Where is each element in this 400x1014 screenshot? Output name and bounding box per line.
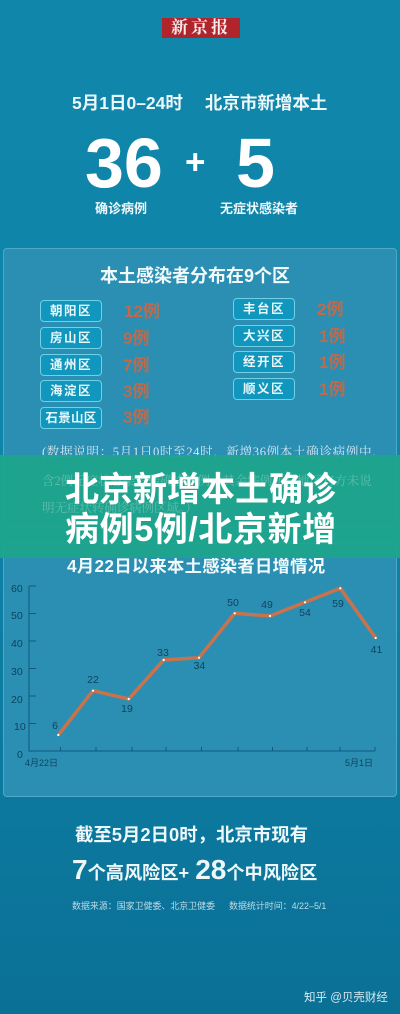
y axis labels: 20 [11,694,23,706]
y axis labels [11,583,26,761]
district list left and right: 3例 [123,408,149,427]
district row: 海淀区 [40,380,102,402]
district row: 通州区 [40,354,102,376]
data labels: 59 [332,598,344,610]
label confirmed cases: 确诊病例 [95,201,147,216]
x axis labels: 5月1日 [345,758,373,768]
district row: 顺义区: 顺义区 [243,382,285,396]
data labels: 33 [157,647,169,659]
plus sign: + [185,143,205,182]
district row: 大兴区: 大兴区 [243,329,285,343]
panel: daily chart [3,543,397,797]
data note: (数据说明：5月1日0时至24时，新增36例本土确诊病例中， [42,445,385,459]
y axis labels: 0 [17,749,23,761]
data labels: 34 [194,660,205,672]
risk area counts: 7个高风险区+ 28个中风险区 [72,854,317,885]
district row: 石景山区 [40,407,102,429]
district list left and right: 12例 [124,302,160,321]
district list left and right: 1例 [319,353,345,372]
district row: 丰台区 [233,298,295,320]
data labels: 22 [87,674,99,686]
y axis labels: 30 [11,666,23,678]
data labels: 50 [227,597,239,609]
banner title: 病例5例/北京新增 [65,511,337,549]
district row: 通州区: 通州区 [50,358,92,372]
data labels: 54 [299,607,311,619]
data line [58,588,376,735]
banner title: 北京新增本土确诊 [65,471,337,509]
data labels: 6 [52,720,58,732]
y axis labels: 40 [11,638,23,650]
district list left and right: 9例 [123,329,149,348]
banner note ghost text: 含2例无症状感染者转确诊病例，其余病例所在地区官方未说 [42,474,372,488]
chart heading: 4月22日以来本土感染者日增情况 [67,556,325,576]
district row: 朝阳区 [40,300,102,322]
data labels [52,597,382,732]
banner note ghost text [42,474,372,514]
asymptomatic count 5: 5 [236,124,275,202]
district row: 朝阳区: 朝阳区 [50,304,92,318]
district list left and right: 2例 [317,300,343,319]
y axis labels: 50 [11,610,23,622]
x axis labels [25,758,373,768]
data labels: 49 [261,599,273,611]
label asymptomatic: 无症状感染者 [220,201,298,216]
banner note ghost text: 明无症状转确诊病例区域。） [42,500,197,514]
masthead logo: 新京报 [171,18,231,37]
banner overlay [0,455,400,558]
banner title [65,471,337,549]
district row: 房山区 [40,327,102,349]
district row: 丰台区: 丰台区 [243,302,285,316]
district row: 石景山区: 石景山区 [45,411,97,425]
district list left and right: 7例 [123,356,149,375]
line chart: daily new local infections [11,583,382,768]
district row: 房山区: 房山区 [50,331,92,345]
district list left and right: 1例 [319,380,345,399]
x axis labels: 4月22日 [25,758,58,768]
y axis labels: 10 [14,721,26,733]
panel heading: 本土感染者分布在9个区 [100,266,290,286]
district list left and right [40,298,345,429]
y axis labels: 60 [11,583,23,595]
district row: 经开区 [233,351,295,373]
district row: 顺义区 [233,378,295,400]
data labels: 19 [121,703,133,715]
district row: 海淀区: 海淀区 [50,384,92,398]
confirmed count 36: 36 [85,124,163,202]
headline date and scope: 5月1日0–24时 北京市新增本土 [72,93,327,113]
data source: 数据来源：国家卫健委、北京卫健委 数据统计时间：4/22–5/1 [72,901,326,911]
district list left and right: 1例 [319,327,345,346]
y axis [29,586,375,751]
data labels: 41 [371,644,382,656]
district row: 经开区: 经开区 [243,355,285,369]
district list left and right: 3例 [123,382,149,401]
risk area heading: 截至5月2日0时，北京市现有 [75,824,308,845]
district row: 大兴区 [233,325,295,347]
data points [57,587,377,736]
watermark: 知乎 @贝壳财经 [304,992,388,1004]
panel: district distribution [3,248,397,528]
